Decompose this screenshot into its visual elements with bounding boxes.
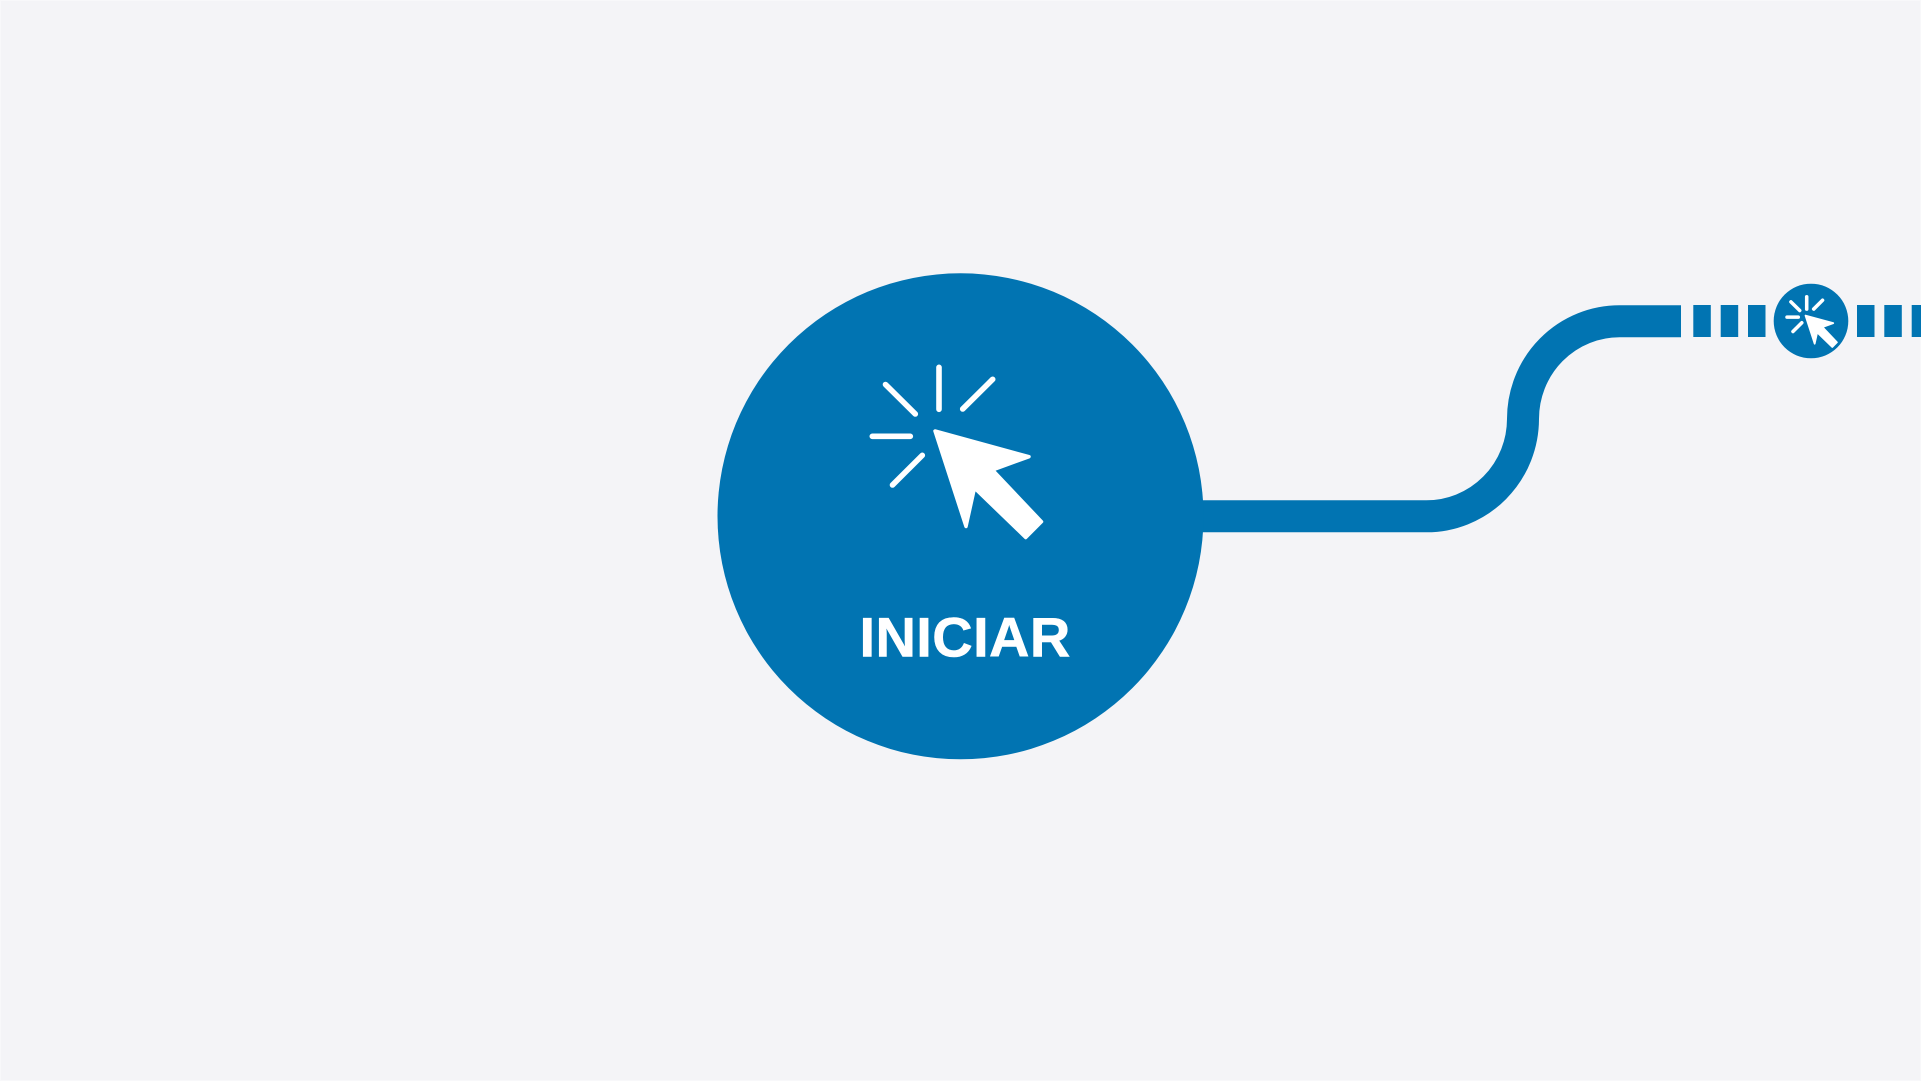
connector: curved line from main circle to dashes [1190, 321, 1681, 516]
icon: small cursor click [1787, 297, 1837, 347]
main circle with icon and label [718, 273, 1204, 759]
dashes: right of small icon [1857, 305, 1921, 337]
click rays [872, 367, 993, 485]
icon: cursor click [872, 367, 1042, 538]
label: INICIAR: INICIAR [860, 606, 1071, 669]
small circle with icon [1774, 284, 1848, 358]
cursor arrow [935, 431, 1042, 538]
dashes: left of small icon [1693, 305, 1766, 337]
